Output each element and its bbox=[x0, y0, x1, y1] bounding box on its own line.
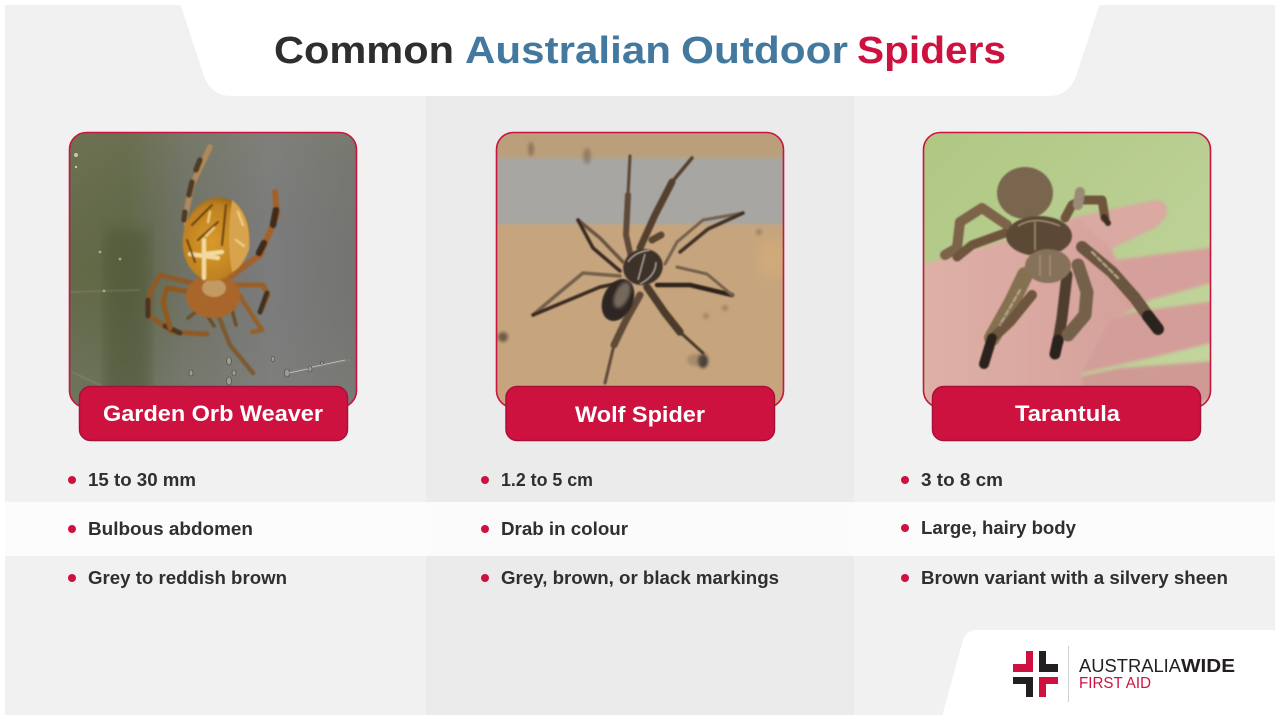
name label bbox=[932, 386, 1200, 440]
title: Outdoor bbox=[681, 30, 848, 72]
white row band bbox=[5, 502, 1275, 556]
name label: Garden Orb Weaver bbox=[103, 401, 323, 426]
icon: first aid cross bbox=[1013, 651, 1058, 697]
logo panel bbox=[941, 630, 1280, 720]
list: Garden Orb Weaver facts: Grey to reddish brown bbox=[88, 567, 287, 588]
name label bbox=[80, 386, 348, 440]
list: Garden Orb Weaver facts: Bulbous abdomen bbox=[88, 518, 253, 539]
logo wordmark bbox=[1079, 656, 1235, 692]
title: Common bbox=[274, 30, 454, 72]
photo: garden orb weaver spider bbox=[69, 132, 357, 408]
photo border bbox=[70, 132, 356, 408]
logo wordmark: AUSTRALIA bbox=[1079, 656, 1181, 676]
logo: Australia Wide First Aid bbox=[1013, 646, 1235, 702]
title: Australian bbox=[465, 30, 671, 72]
list: Tarantula facts: Large, hairy body bbox=[921, 517, 1077, 538]
title bbox=[274, 30, 1006, 72]
list: Wolf Spider facts: 1.2 to 5 cm bbox=[501, 469, 593, 490]
centre column shade bbox=[426, 5, 854, 715]
name label bbox=[506, 386, 774, 440]
name label: Tarantula bbox=[1015, 401, 1121, 426]
list: Wolf Spider facts bbox=[481, 469, 779, 588]
photo: wolf spider bbox=[496, 132, 786, 408]
list: Garden Orb Weaver facts: 15 to 30 mm bbox=[88, 469, 196, 490]
logo wordmark: WIDE bbox=[1181, 656, 1235, 676]
logo wordmark: FIRST AID bbox=[1079, 675, 1151, 692]
list: Tarantula facts: Brown variant with a silvery sheen bbox=[921, 567, 1228, 588]
panel: Wolf Spider bbox=[496, 132, 786, 440]
photo: tarantula on hand bbox=[923, 132, 1215, 408]
name label: Wolf Spider bbox=[575, 402, 705, 427]
list: Garden Orb Weaver facts bbox=[68, 469, 287, 588]
panel: Tarantula bbox=[923, 132, 1215, 440]
panel: Garden Orb Weaver bbox=[69, 132, 357, 440]
list: Tarantula facts: 3 to 8 cm bbox=[921, 469, 1003, 490]
photo border bbox=[924, 132, 1210, 408]
photo border bbox=[496, 132, 784, 408]
list: Wolf Spider facts: Grey, brown, or black markings bbox=[501, 567, 779, 588]
title panel bbox=[181, 0, 1099, 96]
list: Tarantula facts bbox=[901, 469, 1228, 588]
title: Spiders bbox=[857, 30, 1006, 72]
list: Wolf Spider facts: Drab in colour bbox=[501, 518, 628, 539]
